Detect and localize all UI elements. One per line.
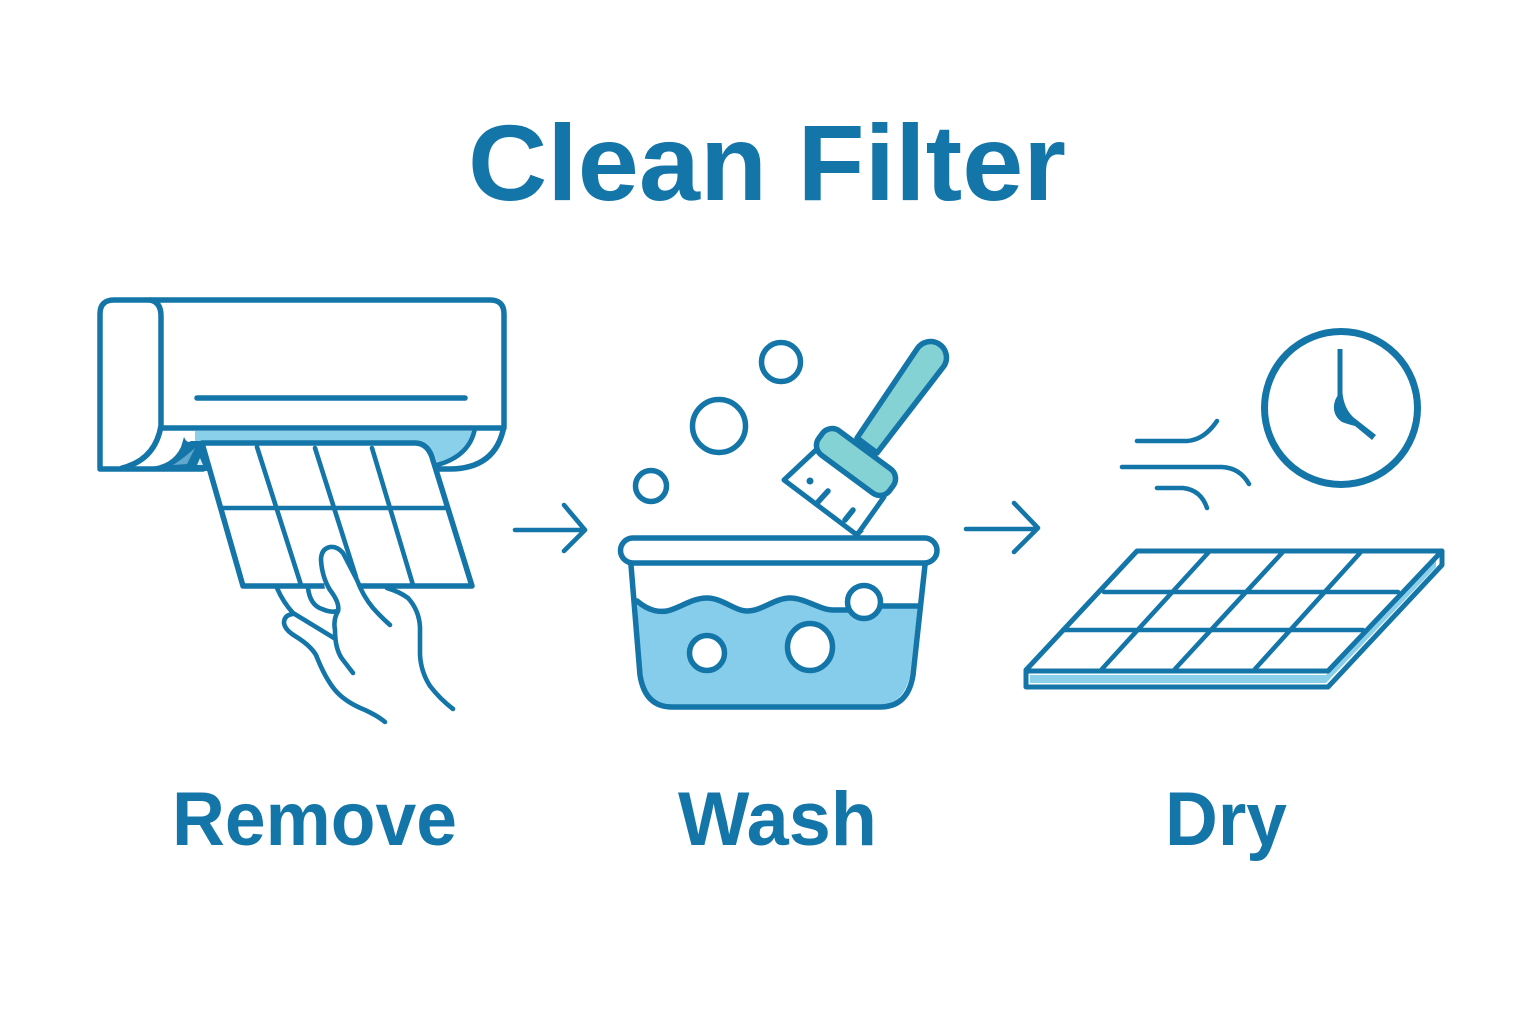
vent strip bbox=[195, 431, 473, 463]
clock bbox=[1264, 332, 1418, 484]
title: Clean Filter bbox=[468, 102, 1066, 223]
air conditioner unit bbox=[100, 300, 504, 471]
air flow lines bbox=[1122, 421, 1249, 508]
drying filter panel bbox=[1026, 551, 1442, 687]
brush bbox=[784, 342, 946, 538]
basin with water bbox=[620, 538, 937, 707]
label: dry: Dry bbox=[1165, 777, 1287, 862]
label: wash: Wash bbox=[678, 777, 877, 862]
illustration: drying filter with clock and air flow bbox=[1026, 332, 1442, 687]
bubbles above basin bbox=[636, 342, 800, 502]
illustration: washing basin with brush and bubbles bbox=[620, 342, 946, 707]
hand bbox=[277, 547, 453, 722]
filter sheet bbox=[202, 443, 472, 586]
arrow: remove to wash bbox=[515, 505, 585, 551]
illustration: air conditioner with filter being removed bbox=[100, 300, 504, 722]
arrow: wash to dry bbox=[966, 503, 1038, 552]
label: remove: Remove bbox=[172, 777, 457, 862]
